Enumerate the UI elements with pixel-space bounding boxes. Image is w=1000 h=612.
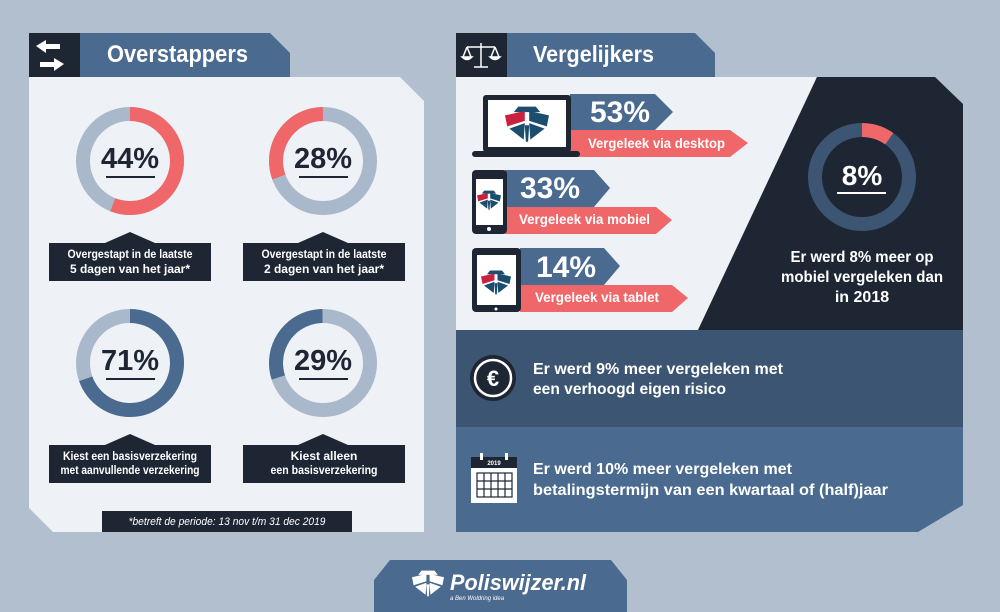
chart: donut 28% xyxy=(263,101,383,221)
text: mobiel vergeleken: in 2018 xyxy=(835,289,889,306)
device: mobiel 33%: Vergeleek via mobiel xyxy=(519,211,650,227)
header: overstappers: Overstappers xyxy=(107,41,248,68)
footer: logo xyxy=(374,560,627,612)
callout: alleen basis xyxy=(243,434,405,483)
chart: donut 29%: 29% xyxy=(294,345,352,377)
chart: donut 71%: 71% xyxy=(101,345,159,377)
band: eigen risico: een verhoogd eigen risico xyxy=(533,381,726,398)
chart: donut 29% xyxy=(264,304,382,422)
callout: aanvullend: met aanvullende verzekering xyxy=(60,463,200,477)
icon: arrows xyxy=(36,40,64,71)
callout: alleen basis: een basisverzekering xyxy=(270,463,378,477)
device: desktop 53% xyxy=(472,94,748,157)
icon: calendar: 2019 xyxy=(487,461,501,467)
icon: scales xyxy=(462,43,500,67)
device: tablet 14%: 14% xyxy=(536,251,596,284)
device: tablet 14% xyxy=(472,248,688,312)
chart: donut 44%: 44% xyxy=(101,143,159,175)
callout: 5 dagen xyxy=(49,232,211,281)
callout: 2 dagen: Overgestapt in de laatste xyxy=(262,247,387,261)
device: mobiel 33% xyxy=(472,170,672,234)
chart: donut 8%: 8% xyxy=(842,160,882,191)
band: betalingstermijn xyxy=(456,427,963,532)
callout: alleen basis: Kiest alleen xyxy=(291,449,357,463)
callout: 2 dagen xyxy=(243,232,405,281)
chart: donut 8% xyxy=(815,130,909,224)
callout: 2 dagen: 2 dagen van het jaar* xyxy=(264,262,384,276)
panel: vergelijkers xyxy=(456,33,963,532)
header: vergelijkers xyxy=(456,33,715,77)
band: betalingstermijn: Er werd 10% meer vergeleken met xyxy=(533,461,793,478)
band: eigen risico: Er werd 9% meer vergeleken met xyxy=(533,361,784,378)
device: mobiel 33%: 33% xyxy=(520,172,580,205)
callout: 5 dagen: 5 dagen van het jaar* xyxy=(70,262,190,276)
header: vergelijkers: Vergelijkers xyxy=(533,41,654,67)
text: mobiel vergeleken: Er werd 8% meer op xyxy=(790,249,934,266)
header: overstappers xyxy=(29,33,290,77)
chart: donut 71% xyxy=(83,316,177,410)
icon: calendar xyxy=(471,453,517,503)
panel: overstappers xyxy=(29,33,424,532)
callout: aanvullend: Kiest een basisverzekering xyxy=(63,449,197,463)
footer: logo: Poliswijzer.nl xyxy=(450,570,587,595)
icon: euro: € xyxy=(487,366,499,391)
callout: 5 dagen: Overgestapt in de laatste xyxy=(68,247,193,261)
device: desktop 53%: Vergeleek via desktop xyxy=(588,135,725,151)
callout: aanvullend xyxy=(49,434,211,483)
footnote: *betreft de periode: 13 nov t/m 31 dec 2019 xyxy=(128,516,326,528)
chart: donut 44% xyxy=(83,114,177,208)
band: betalingstermijn: betalingstermijn van een kwartaal of (half)jaar xyxy=(533,482,888,499)
icon: euro xyxy=(470,355,516,401)
text: mobiel vergeleken xyxy=(781,249,943,306)
device: tablet 14%: Vergeleek via tablet xyxy=(535,289,659,305)
chart: donut 28%: 28% xyxy=(294,143,352,175)
band: eigen risico xyxy=(456,330,963,427)
footnote xyxy=(102,511,352,532)
device: desktop 53%: 53% xyxy=(590,96,650,129)
text: mobiel vergeleken: mobiel vergeleken dan xyxy=(781,269,943,286)
footer: logo: a Ben Woldring idea xyxy=(450,596,505,602)
